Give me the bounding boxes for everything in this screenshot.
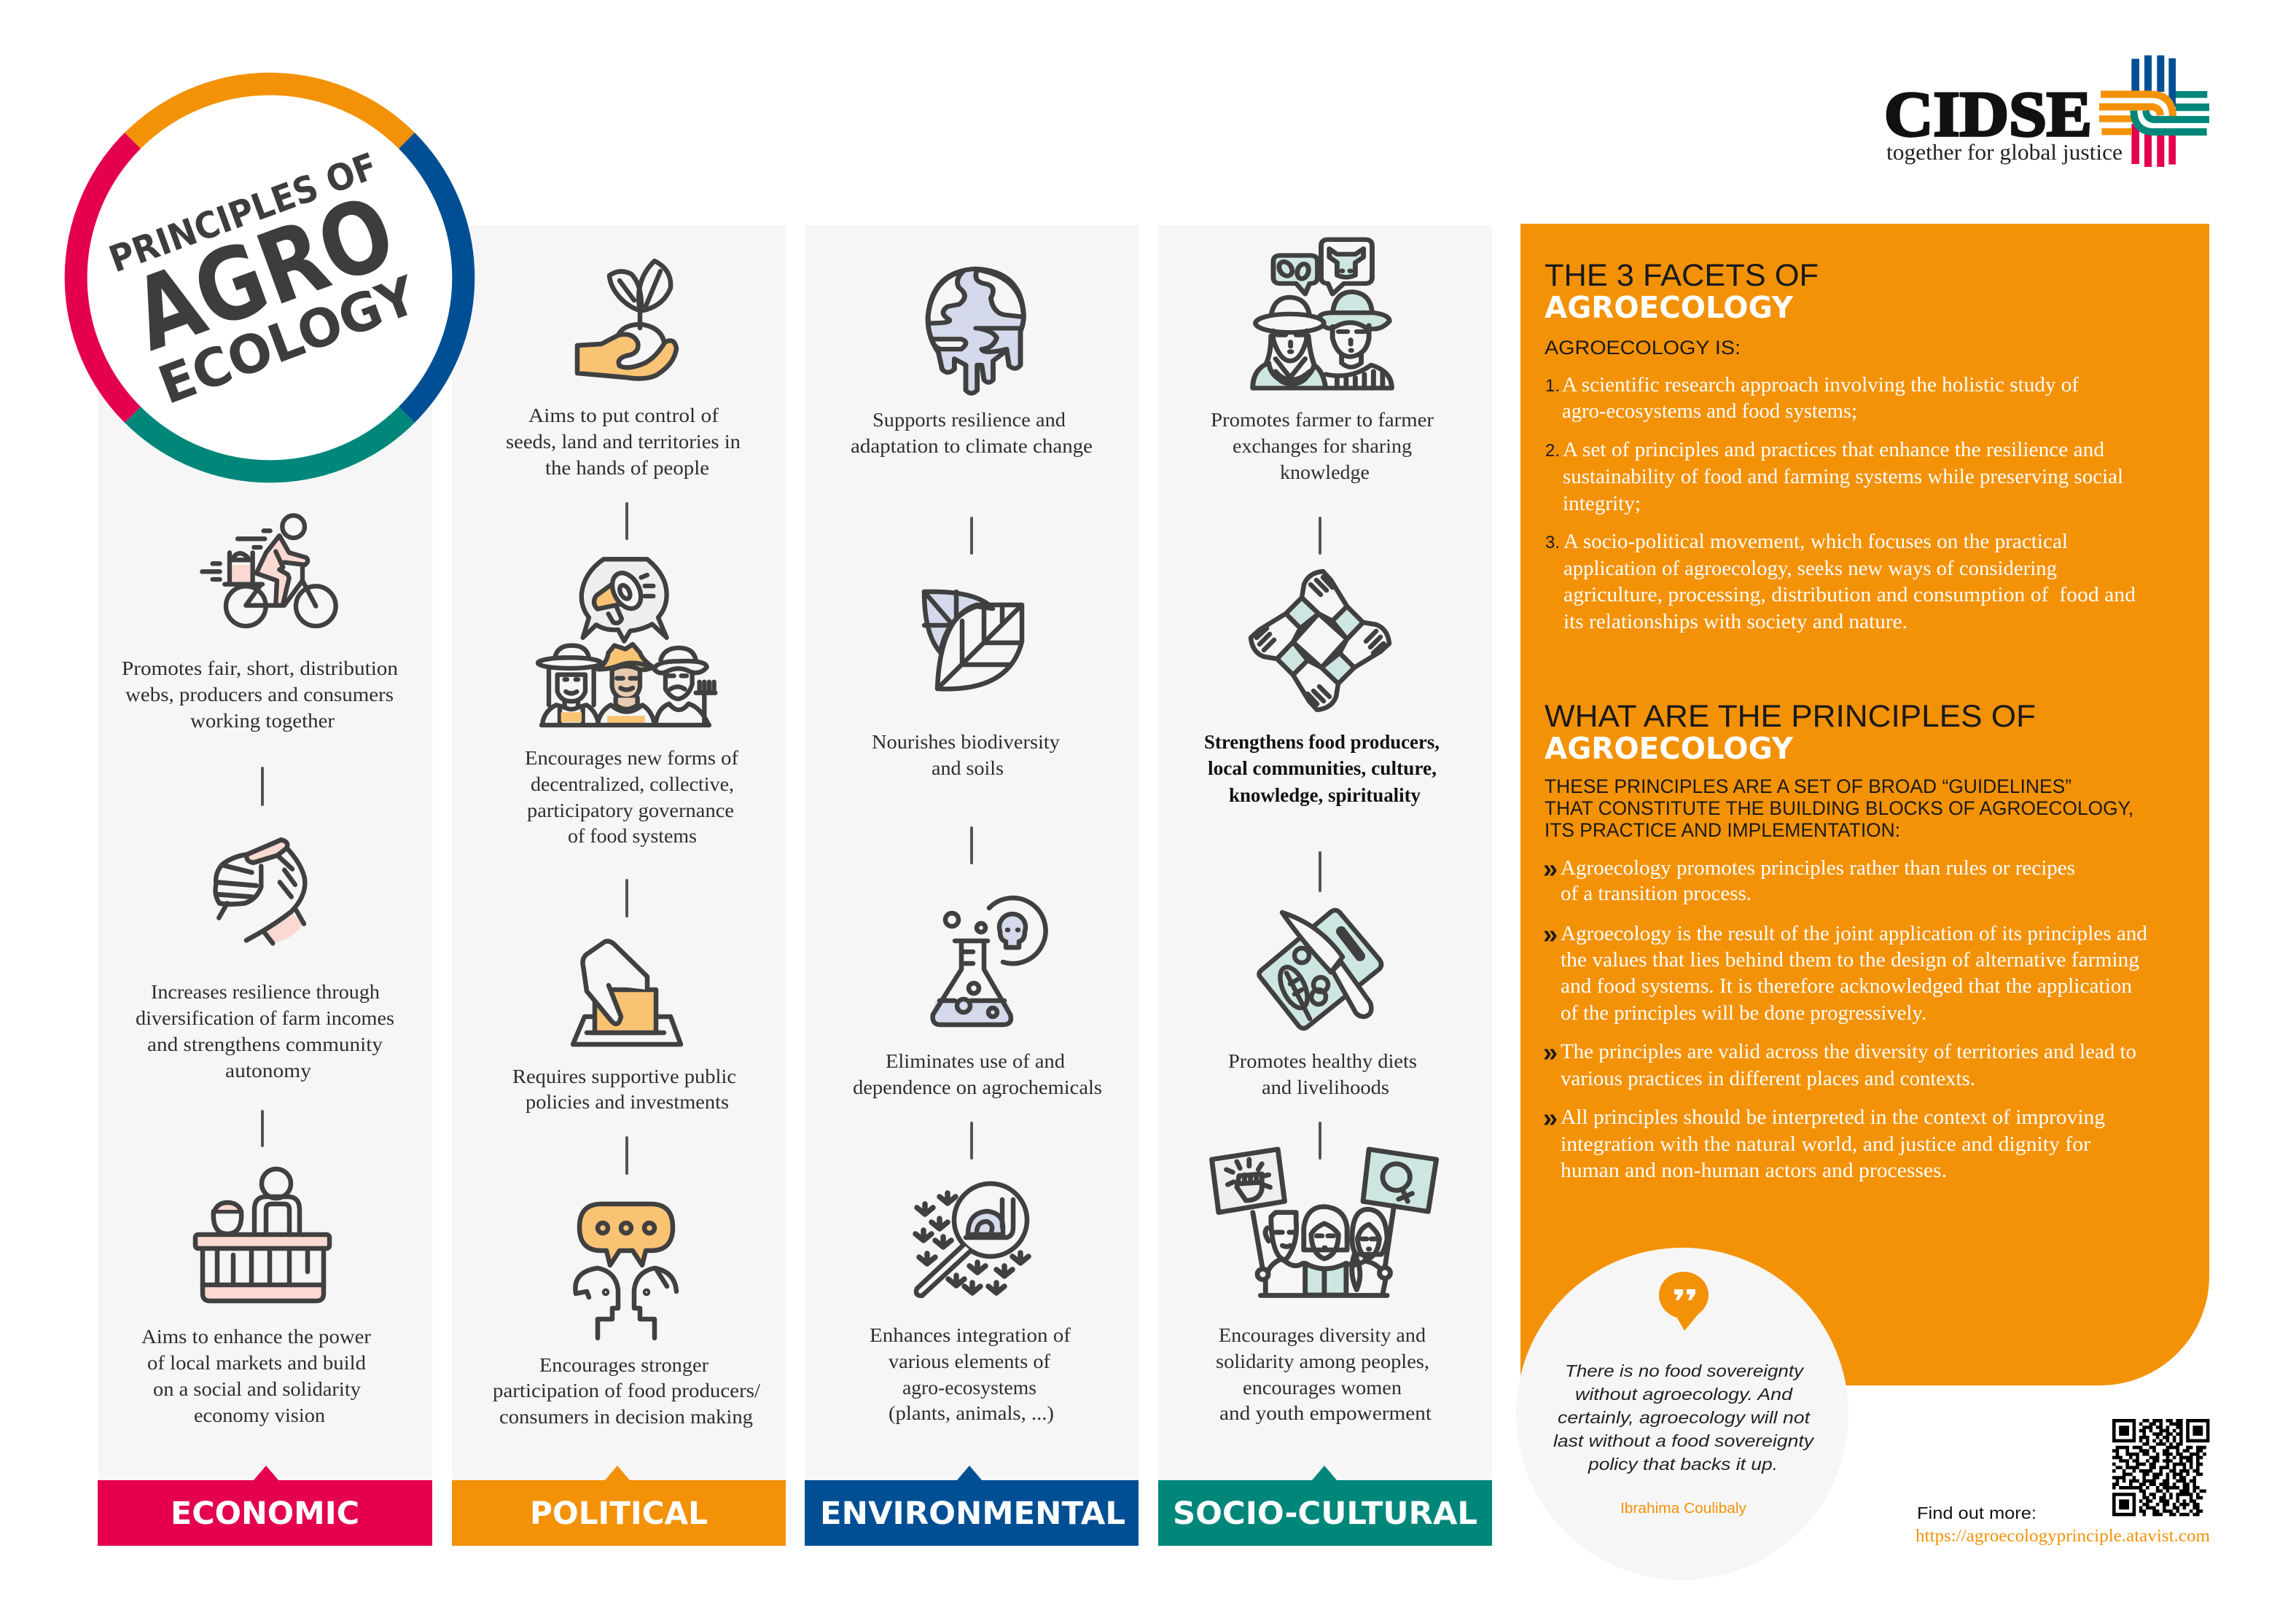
text: aims to put control: Aims to put control of	[528, 404, 719, 426]
text: promotes farmer to farmer	[1211, 409, 1434, 483]
text: principles intro: ITS PRACTICE AND IMPLEMENTATION:	[1545, 819, 1900, 841]
text: quotation: policy that backs it up.	[1588, 1455, 1778, 1474]
text: promotes farmer to farmer: exchanges for sharing	[1233, 435, 1412, 457]
heading: the 3 facets of agroecology: AGROECOLOGY	[1545, 290, 1794, 325]
list: principle bullets: All principles should be interpreted in the context of improving	[1561, 1106, 2105, 1129]
text: eliminates agrochemicals: Eliminates use of and	[886, 1050, 1066, 1072]
QR code	[2112, 1420, 2209, 1514]
list: principle bullets: of the principles will be done progressively.	[1561, 1002, 1926, 1025]
icon: cutting board and knife	[1259, 910, 1381, 1028]
list: three facets: application of agroecology, seeks new ways of considering	[1563, 558, 2057, 580]
text: promotes fair short distribution: webs, producers and consumers	[125, 684, 394, 705]
text: encourages diversity: encourages women	[1243, 1377, 1402, 1399]
list: three facets: 3.	[1545, 533, 1560, 552]
text: requires supportive policies: Requires supportive public	[512, 1066, 736, 1087]
list: principle bullets: human and non-human actors and processes.	[1561, 1160, 1947, 1182]
heading: what are the principles	[1545, 699, 2036, 766]
text: increases resilience: diversification of farm incomes	[136, 1007, 394, 1029]
list: principle bullets: integration with the natural world, and justice and dignity for	[1561, 1133, 2091, 1156]
economic label band: ECONOMIC	[171, 1495, 359, 1532]
text: nourishes biodiversity: Nourishes biodiversity	[872, 731, 1061, 753]
text: promotes healthy diets	[1228, 1050, 1417, 1098]
logo: CIDSE: CIDSE	[1884, 79, 2092, 150]
text: promotes fair short distribution: Promotes fair, short, distribution	[122, 657, 399, 679]
title badge: principles of agroecology: ECOLOGY	[151, 264, 425, 416]
text: encourages diversity: and youth empowerment	[1219, 1402, 1432, 1424]
text: encourages diversity: solidarity among peoples,	[1216, 1350, 1429, 1372]
list: principle bullets: »	[1543, 1103, 1558, 1133]
icon: melting globe	[928, 269, 1023, 394]
text: encourages new forms: of food systems	[568, 825, 697, 847]
text: strengthens food producers: local communities, culture,	[1208, 757, 1437, 779]
text: encourages new forms: Encourages new forms of	[525, 747, 738, 769]
heading: what are the principles: AGROECOLOGY	[1545, 731, 1794, 766]
text: nourishes biodiversity: and soils	[932, 757, 1004, 779]
icon: four clasped hands	[1251, 571, 1389, 710]
text: requires supportive policies	[512, 1066, 736, 1113]
list: three facets: A set of principles and practices that enhance the resilience and	[1563, 439, 2104, 461]
environmental label band	[805, 1466, 1139, 1546]
text: aims to put control: seeds, land and territories in	[506, 431, 741, 453]
list: three facets: its relationships with society and nature.	[1563, 611, 1908, 633]
icon: magnifier on snail and plants	[915, 1184, 1028, 1296]
icon: hand casting ballot	[573, 941, 681, 1044]
political label band	[452, 1466, 786, 1546]
text: aims to enhance the power	[141, 1326, 371, 1426]
icon: flask with skull	[932, 898, 1046, 1025]
text: encourages new forms: participatory governance	[527, 799, 734, 821]
text: encourages new forms: decentralized, collective,	[531, 773, 734, 795]
text: supports resilience: adaptation to climate change	[851, 435, 1093, 457]
heading: the 3 facets of agroecology	[1545, 258, 1819, 325]
text: aims to enhance the power: economy vision	[194, 1404, 326, 1426]
icon: protesters with signs	[1211, 1149, 1437, 1296]
logo: CIDSE	[1884, 55, 2209, 167]
text: principles intro: THESE PRINCIPLES ARE A SET OF BROAD “GUIDELINES”	[1545, 775, 2072, 797]
callout: quote circle	[1516, 1248, 1848, 1580]
text: eliminates agrochemicals	[853, 1050, 1102, 1098]
text: find out more and link: Find out more:	[1917, 1504, 2037, 1522]
text: promotes healthy diets: and livelihoods	[1262, 1076, 1389, 1098]
list: principle bullets: Agroecology promotes principles rather than rules or recipes	[1561, 857, 2075, 880]
text: strengthens food producers: knowledge, spirituality	[1229, 784, 1421, 806]
panel: political column	[452, 225, 786, 1546]
text: enhances integration: agro-ecosystems	[902, 1377, 1036, 1399]
icon: arm clasp handshake	[216, 840, 305, 943]
text: aims to enhance the power: of local markets and build	[147, 1352, 367, 1374]
text: increases resilience: Increases resilience through	[151, 981, 380, 1003]
text: encourages stronger participation	[493, 1354, 761, 1428]
icon: woven cross	[2099, 55, 2209, 167]
text: aims to put control: the hands of people	[545, 457, 709, 479]
text: agroecology is: AGROECOLOGY IS:	[1545, 337, 1741, 359]
text: encourages stronger participation: consumers in decision making	[499, 1406, 753, 1428]
text: encourages diversity: Encourages diversity and	[1219, 1324, 1426, 1346]
text: find out more and link	[1916, 1504, 2210, 1546]
icon: quote bubble	[1659, 1272, 1709, 1331]
text: eliminates agrochemicals: dependence on agrochemicals	[853, 1076, 1102, 1098]
text: promotes farmer to farmer: knowledge	[1280, 461, 1370, 483]
list: principle bullets: and food systems. It is therefore acknowledged that the application	[1561, 975, 2132, 998]
environmental label band: ENVIRONMENTAL	[820, 1495, 1125, 1532]
panel: orange information panel	[1520, 224, 2209, 1385]
panel: socio-cultural column	[1158, 225, 1492, 1546]
icon: leaves	[924, 592, 1022, 689]
list: principle bullets: various practices in different places and contexts.	[1561, 1068, 1975, 1090]
list: three facets: A scientific research approach involving the holistic study of	[1562, 374, 2080, 396]
text: strengthens food producers	[1204, 731, 1440, 806]
text: promotes farmer to farmer: Promotes farmer to farmer	[1211, 409, 1434, 431]
text: nourishes biodiversity	[872, 731, 1061, 779]
socio-cultural label band	[1158, 1466, 1492, 1546]
icon: market stall vendor	[195, 1169, 329, 1301]
text: principles intro	[1545, 775, 2133, 841]
socio-cultural label band: SOCIO-CULTURAL	[1173, 1495, 1477, 1532]
list: principle bullets: of a transition process.	[1561, 883, 1752, 905]
title badge: principles of agroecology: AGRO	[119, 174, 409, 374]
text: encourages new forms	[525, 747, 738, 847]
text: aims to put control	[506, 404, 741, 479]
title badge: principles of agroecology	[64, 72, 475, 483]
text: promotes fair short distribution	[122, 657, 399, 732]
text: promotes fair short distribution: working together	[190, 710, 335, 732]
text: quote author: Ibrahima Coulibaly	[1620, 1501, 1746, 1517]
text: increases resilience: autonomy	[225, 1060, 312, 1082]
heading: what are the principles: WHAT ARE THE PRINCIPLES OF	[1545, 699, 2036, 734]
text: quotation: certainly, agroecology will not	[1558, 1408, 1811, 1427]
text: encourages stronger participation: participation of food producers/	[493, 1380, 761, 1401]
text: quotation	[1553, 1361, 1815, 1474]
text: increases resilience	[136, 981, 394, 1082]
text: enhances integration: various elements of	[889, 1350, 1050, 1372]
text: find out more and link: https://agroecologyprinciple.atavist.com	[1916, 1527, 2210, 1546]
icon: cyclist delivering food	[202, 515, 336, 626]
text: supports resilience	[851, 409, 1093, 457]
list: principle bullets: The principles are valid across the diversity of territories and lead to	[1561, 1041, 2136, 1063]
panel: environmental column	[805, 225, 1139, 1546]
text: aims to enhance the power: Aims to enhance the power	[141, 1326, 371, 1348]
list: three facets: 2.	[1545, 441, 1560, 461]
economic label band	[98, 1466, 432, 1546]
text: enhances integration: Enhances integration of	[870, 1324, 1071, 1346]
text: increases resilience: and strengthens community	[147, 1033, 383, 1055]
text: encourages diversity	[1216, 1324, 1432, 1424]
title badge: principles of agroecology: PRINCIPLES OF	[104, 145, 383, 281]
logo: CIDSE: together for global justice	[1886, 139, 2123, 165]
list: three facets: agro-ecosystems and food systems;	[1562, 400, 1857, 423]
icon: two heads with speech bubble	[575, 1204, 676, 1338]
list: three facets	[1545, 374, 2136, 633]
text: aims to enhance the power: on a social and solidarity	[153, 1378, 362, 1400]
list: principle bullets: »	[1543, 853, 1558, 883]
text: quotation: last without a food sovereignty	[1553, 1431, 1815, 1450]
list: principle bullets	[1543, 853, 2147, 1182]
text: principles intro: THAT CONSTITUTE THE BUILDING BLOCKS OF AGROECOLOGY,	[1545, 797, 2133, 819]
text: promotes healthy diets: Promotes healthy diets	[1228, 1050, 1417, 1072]
list: three facets: 1.	[1545, 376, 1560, 396]
text: quotation: There is no food sovereignty	[1565, 1361, 1805, 1380]
text: enhances integration	[870, 1324, 1071, 1424]
text: quotation: without agroecology. And	[1575, 1385, 1793, 1404]
list: three facets: sustainability of food and farming systems while preserving social	[1563, 466, 2123, 488]
list: three facets: A socio-political movement, which focuses on the practical	[1563, 531, 2068, 553]
list: principle bullets: the values that lies behind them to the design of alternative farming	[1561, 949, 2139, 971]
list: principle bullets: »	[1543, 919, 1558, 949]
icon: farmers with megaphone bubble	[538, 559, 715, 725]
political label band: POLITICAL	[530, 1495, 708, 1532]
text: encourages stronger participation: Encourages stronger	[539, 1354, 708, 1376]
text: enhances integration: (plants, animals, ...)	[889, 1402, 1054, 1424]
icon: sprout in hand	[577, 261, 676, 378]
list: principle bullets: Agroecology is the result of the joint application of its principles and	[1561, 923, 2147, 945]
icon: two farmers talking	[1253, 240, 1391, 388]
list: principle bullets: »	[1543, 1037, 1558, 1067]
text: supports resilience: Supports resilience and	[872, 409, 1066, 431]
heading: the 3 facets of agroecology: THE 3 FACETS OF	[1545, 258, 1819, 293]
text: requires supportive policies: policies and investments	[526, 1091, 729, 1113]
panel: economic column	[98, 225, 432, 1546]
list: three facets: agriculture, processing, distribution and consumption of food and	[1563, 584, 2136, 606]
text: strengthens food producers: Strengthens food producers,	[1204, 731, 1440, 753]
list: three facets: integrity;	[1563, 493, 1641, 515]
